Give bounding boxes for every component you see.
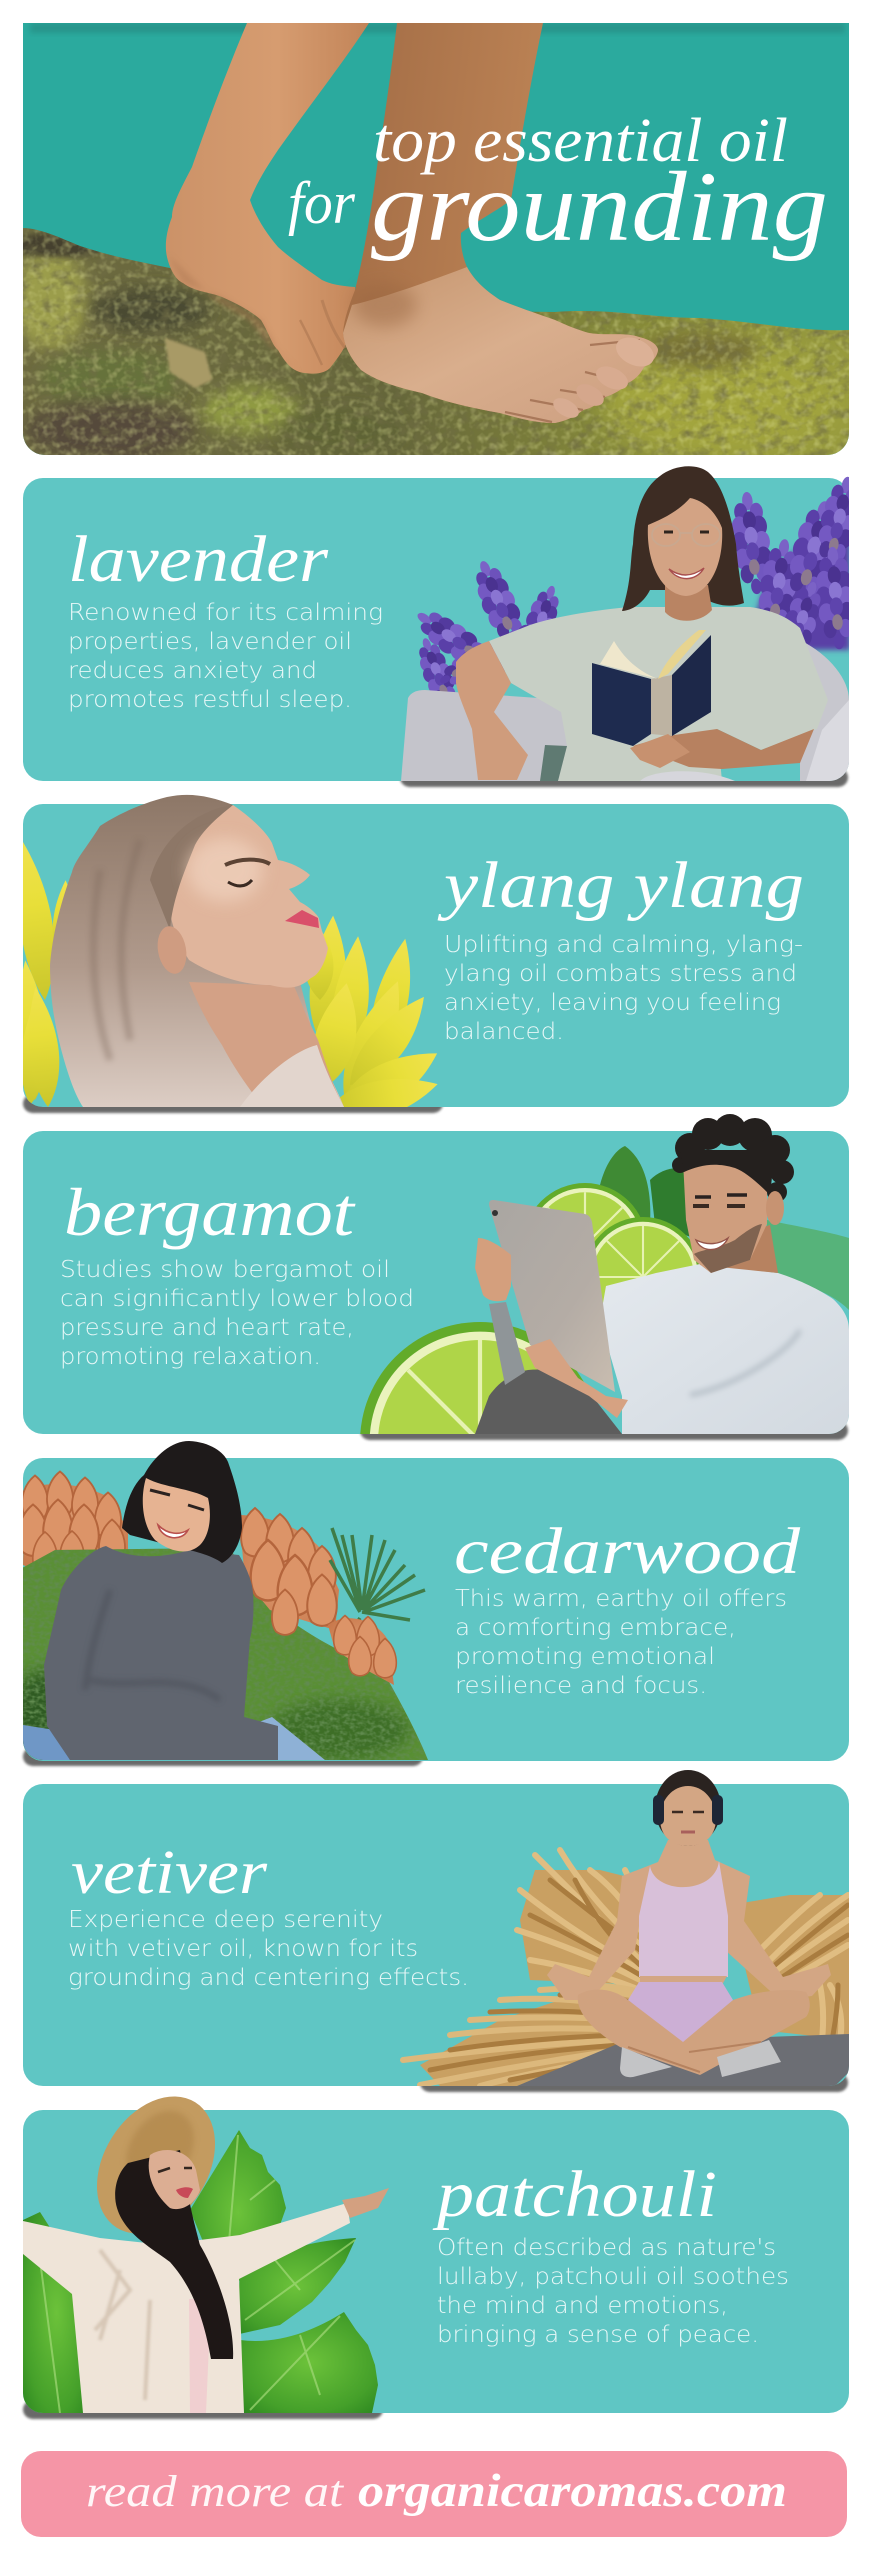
pink top: [189, 2299, 211, 2413]
centre cedar cone: [239, 1515, 339, 1630]
image shadow: [420, 2073, 848, 2092]
card background: [23, 1131, 849, 1434]
text: bergamot description: pressure and heart rate,: [60, 1313, 354, 1341]
text: vetiver description: grounding and centering effects.: [68, 1963, 469, 1991]
left cedar cone: [23, 1484, 128, 1572]
text: lavender description: [68, 598, 383, 713]
title line: top essential oil: top essential oil: [373, 107, 788, 175]
eye, brow, lips: [225, 860, 270, 865]
neck and face: [665, 585, 712, 621]
shorts: [628, 1982, 733, 2042]
text: patchouli description: [437, 2233, 789, 2348]
image shadow: [23, 2400, 383, 2419]
hands: [475, 1238, 511, 1301]
trousers: [475, 1369, 622, 1434]
face: [168, 805, 328, 988]
text: cedarwood description: This warm, earthy oil offers: [455, 1584, 787, 1612]
book: [592, 663, 651, 746]
shoes: [620, 2047, 672, 2077]
text: read more at: read more at: [86, 2467, 345, 2516]
text: lavender description: Renowned for its calming: [68, 598, 383, 626]
waist: [640, 1976, 727, 1985]
card background: [23, 1784, 849, 2086]
text: lavender description: reduces anxiety and: [68, 656, 317, 684]
shirt: [489, 607, 828, 781]
panel: cedarwood: [10, 1441, 849, 1770]
text: ylang ylang description: balanced.: [444, 1017, 564, 1045]
image shadow: [400, 768, 848, 787]
text: organicaromas.com: organicaromas.com: [358, 2465, 787, 2517]
hand: [342, 2188, 389, 2218]
text: ylang ylang description: ylang oil combats stress and: [444, 959, 797, 987]
chest and neck: [622, 1840, 750, 1905]
heading: ylang ylang: ylang ylang: [437, 849, 804, 922]
panel: ylang ylang: [8, 795, 849, 1126]
text: patchouli description: lullaby, patchouli oil soothes: [437, 2262, 789, 2290]
curly hair: [672, 1114, 794, 1202]
woman with patchouli leaves: [23, 2075, 389, 2413]
pillow: [765, 1220, 849, 1310]
text: patchouli description: the mind and emotions,: [437, 2291, 728, 2319]
image shadow: [23, 1094, 443, 1113]
header photo: bare feet on moss: [10, 23, 849, 460]
yoga mat: [517, 2034, 849, 2086]
sweater: [44, 1546, 278, 1760]
heading: cedarwood: cedarwood: [454, 1515, 801, 1588]
front leg: [343, 23, 658, 423]
heading: patchouli: patchouli: [433, 2158, 717, 2231]
text: cedarwood description: [455, 1584, 787, 1699]
woman meditating with vetiver roots: [403, 1770, 850, 2086]
mossy ground: [10, 220, 849, 460]
text: bergamot description: can significantly lower blood: [60, 1284, 414, 1312]
banner background: [21, 2451, 847, 2537]
panel: patchouli: [23, 2075, 849, 2419]
panel: bergamot: [23, 1114, 850, 1442]
legs: [578, 1990, 810, 2075]
text: patchouli description: bringing a sense of peace.: [437, 2320, 759, 2348]
neck: [700, 1225, 778, 1273]
neck: [189, 982, 344, 1107]
text: bergamot description: Studies show bergamot oil: [60, 1255, 390, 1283]
leaves: [600, 1146, 650, 1225]
text: vetiver description: Experience deep serenity: [68, 1905, 383, 1933]
text: bergamot description: promoting relaxation.: [60, 1342, 321, 1370]
heading: bergamot: bergamot: [64, 1174, 356, 1250]
text: patchouli description: Often described as nature's: [437, 2233, 776, 2261]
call to action banner: [21, 2451, 847, 2537]
jacket: [23, 2203, 350, 2413]
text: cedarwood description: resilience and focus.: [455, 1671, 707, 1699]
jeans: [215, 1717, 325, 1760]
glasses and smile: [652, 524, 720, 546]
heading: lavender: lavender: [68, 523, 328, 596]
panel: lavender: [23, 466, 865, 787]
text: cedarwood description: a comforting embrace,: [455, 1613, 736, 1641]
root strands: [403, 1850, 848, 2086]
card background: [23, 1458, 849, 1761]
image shadow: [360, 1421, 848, 1440]
text: bergamot description: [60, 1255, 414, 1370]
hair: [122, 1441, 242, 1563]
lower cedar cone: [328, 1618, 394, 1685]
man with tablet and bergamot: [360, 1114, 849, 1434]
top: [639, 1861, 728, 1977]
text: lavender description: properties, lavender oil: [68, 627, 352, 655]
ear: [158, 926, 186, 974]
text: lavender description: promotes restful sleep.: [68, 685, 352, 713]
face: [143, 1478, 210, 1551]
pale hair over neck: [240, 1045, 344, 1107]
title word: grounding: grounding: [371, 151, 828, 262]
text: ylang ylang description: anxiety, leaving you feeling: [444, 988, 781, 1016]
back leg: [166, 23, 369, 374]
heading: vetiver: vetiver: [71, 1839, 268, 1907]
toes: [505, 340, 640, 422]
hair: [115, 2150, 233, 2359]
image shadow: [23, 1747, 423, 1766]
hair: [50, 795, 344, 1107]
arms: [547, 1876, 645, 2000]
panel: vetiver: [23, 1770, 850, 2092]
woman reading with lavender: [401, 466, 865, 781]
sofa: [401, 690, 570, 781]
pine needles: [330, 1528, 425, 1640]
sweater: [600, 1264, 849, 1434]
sleeve: [489, 1302, 525, 1385]
card background: [23, 804, 849, 1107]
card background: [23, 478, 849, 781]
hair: [622, 466, 744, 611]
woman with ylang ylang flowers: [23, 794, 438, 1107]
grass hill: [10, 1540, 432, 1770]
text: ylang ylang description: [444, 930, 803, 1045]
text: ylang ylang description: Uplifting and calming, ylang-: [444, 930, 803, 958]
card background: [23, 2110, 849, 2413]
arms: [456, 641, 528, 780]
title word: for: for: [288, 170, 356, 236]
text: vetiver description: with vetiver oil, known for its: [68, 1934, 418, 1962]
head and headphones: [655, 1770, 721, 1846]
text: vetiver description: [68, 1905, 469, 1991]
woman on grass with cedar cones: [10, 1441, 432, 1770]
tablet: [489, 1200, 615, 1392]
eyes and smile: [693, 1204, 745, 1208]
panel: header: [10, 23, 849, 460]
text: cedarwood description: promoting emotional: [455, 1642, 715, 1670]
roots base: [520, 1870, 650, 1985]
face: [149, 2150, 200, 2209]
leaves: [190, 2130, 286, 2295]
bergamot slices: [536, 1183, 640, 1242]
face: [683, 1160, 767, 1273]
hat: [73, 2075, 239, 2255]
